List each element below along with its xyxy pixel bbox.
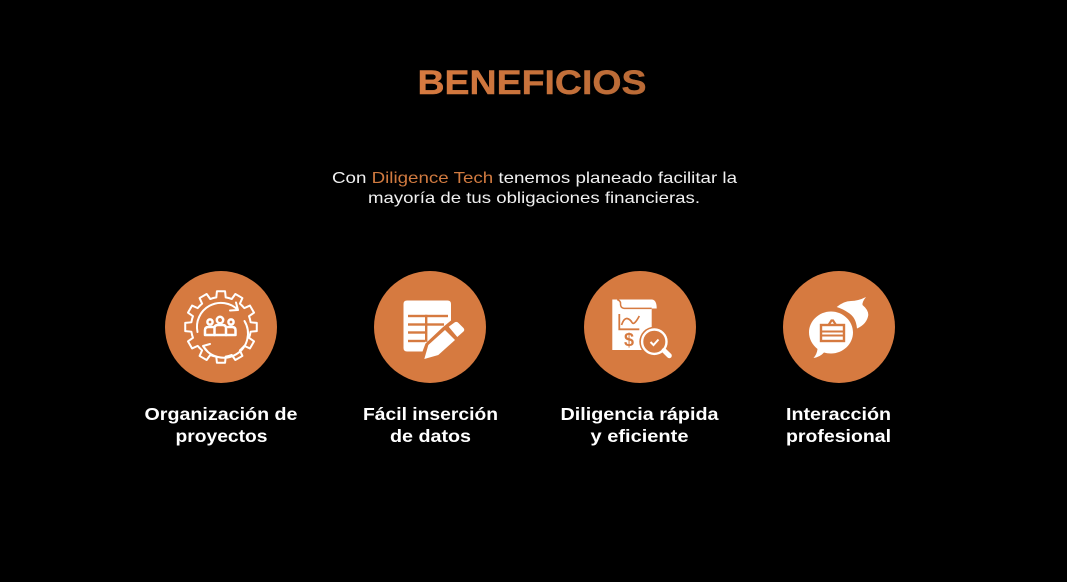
label: proyectos (176, 426, 268, 446)
label: Fácil inserción (363, 404, 498, 424)
icon circle: interaction (783, 271, 895, 383)
icon: financial report with magnifier: $ (624, 330, 634, 350)
intro text (332, 170, 737, 207)
label (786, 404, 891, 446)
icon circle: organization (165, 271, 277, 383)
label: Diligencia rápida (560, 404, 719, 424)
benefit: Organización de proyectos (144, 271, 298, 446)
icon: speech bubbles with briefcase (809, 297, 868, 358)
label: Interacción (786, 404, 891, 424)
icon circle: data entry (374, 271, 486, 383)
intro text: Con Diligence Tech tenemos planeado facilitar la (332, 170, 737, 187)
benefit: Interacción profesional (783, 271, 895, 446)
icon: gear with team (185, 291, 257, 363)
icon circle: diligence (584, 271, 696, 383)
label (363, 404, 498, 446)
label (144, 404, 298, 446)
label: Organización de (144, 404, 298, 424)
label: de datos (390, 426, 471, 446)
benefit: Diligencia rápida y eficiente (560, 271, 719, 446)
title: BENEFICIOS (418, 64, 646, 102)
label: profesional (786, 426, 891, 446)
icon: financial report with magnifier (612, 300, 669, 357)
icon: table with pencil (404, 300, 464, 359)
intro text: mayoría de tus obligaciones financieras. (368, 190, 700, 207)
benefit: Fácil inserción de datos (363, 271, 498, 446)
label (560, 404, 719, 446)
label: y eficiente (590, 426, 689, 446)
